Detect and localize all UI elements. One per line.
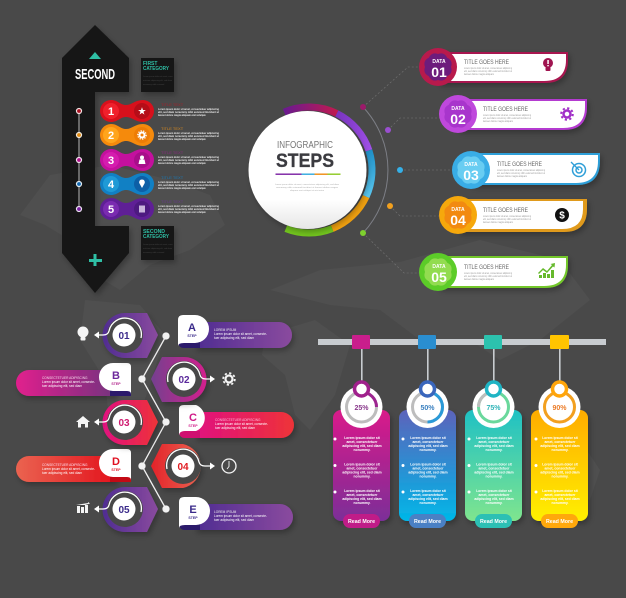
step pill 3: Lorem ipsum dolor sit amet, consectetuer adipiscing <box>158 155 219 159</box>
step C banner: Lorem ipsum dolor sit amet, consecte- <box>215 422 268 426</box>
hexagon step 01 <box>78 313 158 358</box>
data banner 03: laoreet dolore magna aliquam <box>497 175 527 178</box>
progress card 75%: adipiscing elit, sed diam <box>474 444 514 448</box>
progress card 75%: amet, consectetuer <box>479 440 510 444</box>
step pill 5: laoreet dolore magna aliquam erat volutpat. <box>158 210 206 214</box>
progress card 75%: adipiscing elit, sed diam <box>474 470 514 474</box>
heading: second: SECOND <box>75 66 115 83</box>
icon: dollar <box>555 208 569 222</box>
data banner 04: Lorem ipsum dolor sit amet, consectetuer adipiscing <box>483 215 532 218</box>
data banner 03: 03 <box>463 167 479 183</box>
progress card 90%: adipiscing elit, sed diam <box>540 470 580 474</box>
icon: teal plus <box>89 254 102 266</box>
step B banner: Lorem ipsum dolor sit amet, consecte- <box>42 380 95 384</box>
hexagon step 05: 05 <box>118 505 130 516</box>
step A banner <box>178 315 292 348</box>
first category box: CATEGORY <box>143 66 170 72</box>
title: INFOGRAPHIC <box>277 140 333 151</box>
progress card 90%: nonummy. <box>552 501 569 505</box>
progress card 90%: adipiscing elit, sed diam <box>540 497 580 501</box>
progress card 25%: Lorem ipsum dolor sit <box>344 489 381 493</box>
second category box: Lorem ipsum dolor sit amet, cons <box>143 243 172 246</box>
data banner 03: Lorem ipsum dolor sit amet, consectetuer adipiscing <box>497 169 546 172</box>
data banner 03: TITLE GOES HERE <box>497 161 543 168</box>
progress card 25%: adipiscing elit, sed diam <box>342 497 382 501</box>
data banner 04: laoreet dolore magna aliquam <box>483 221 513 224</box>
step pill 2: elit, sed diam nonummy nibh euismod tincidunt ut <box>158 134 219 138</box>
step pill 3: elit, sed diam nonummy nibh euismod tincidunt ut <box>158 158 219 162</box>
step pill 1: 1 <box>108 106 114 118</box>
step D banner <box>16 449 131 482</box>
progress card 25%: amet, consectetuer <box>347 440 378 444</box>
progress card 90%: amet, consectetuer <box>545 440 576 444</box>
progress card 75%: amet, consectetuer <box>479 466 510 470</box>
step pill 4: Lorem ipsum dolor sit amet, consectetuer adipiscing <box>158 180 219 184</box>
world map silhouette <box>20 165 600 500</box>
step C banner: C <box>189 412 197 424</box>
progress card 75%: Lorem ipsum dolor sit <box>476 436 513 440</box>
step E banner <box>179 497 293 530</box>
progress card 50% <box>399 335 456 528</box>
step pill 5: TITLE TEXT <box>161 199 184 204</box>
progress card 25%: amet, consectetuer <box>347 466 378 470</box>
step pill 1: ★ <box>138 106 147 118</box>
icon: gear <box>561 108 573 120</box>
progress card 25%: adipiscing elit, sed diam <box>342 444 382 448</box>
step pill 5: Lorem ipsum dolor sit amet, consectetuer adipiscing <box>158 204 219 208</box>
step B banner: B <box>112 370 120 382</box>
progress card 90%: Lorem ipsum dolor sit <box>542 462 579 466</box>
central circle: infographic steps: STEPS <box>276 151 334 172</box>
data banner 01: TITLE GOES HERE <box>464 59 510 66</box>
progress card 75%: nonummy. <box>486 501 503 505</box>
data banner 02 <box>439 95 587 133</box>
progress card 75%: nonummy. <box>486 448 503 452</box>
data banner 03: elit, sed diam nonummy nibh euismod tincidunt ut <box>497 172 545 175</box>
data banner 02: Lorem ipsum dolor sit amet, consectetuer adipiscing <box>483 114 532 117</box>
data banner 04: TITLE GOES HERE <box>483 207 529 214</box>
progress card 90%: adipiscing elit, sed diam <box>540 444 580 448</box>
hexagon step 02 <box>151 357 235 402</box>
progress card 90% <box>531 335 588 528</box>
step A banner: LOREM IPSUM <box>214 328 237 332</box>
data banner 05: Lorem ipsum dolor sit amet, consectetuer adipiscing <box>464 272 513 275</box>
hanging bar <box>318 339 606 345</box>
progress card 75%: amet, consectetuer <box>479 493 510 497</box>
icon: teal triangle <box>89 52 101 59</box>
data banner 03: DATA <box>464 162 478 168</box>
hexagon step 04: 04 <box>177 462 189 473</box>
progress card 75%: adipiscing elit, sed diam <box>474 497 514 501</box>
step pill 3: TITLE TEXT <box>161 150 184 155</box>
progress card 25%: nonummy. <box>354 501 371 505</box>
progress card 50%: Lorem ipsum dolor sit <box>410 462 447 466</box>
central circle: infographic steps: Lorem ipsum dolor sit amet, consectetuer adipiscing elit, sed diam <box>275 183 339 186</box>
step D banner: Lorem ipsum dolor sit amet, consecte- <box>42 467 95 471</box>
step pill 3: 3 <box>108 155 114 167</box>
progress card 25%: Lorem ipsum dolor sit <box>344 436 381 440</box>
step pill 1 <box>100 100 219 122</box>
hexagon step 03 <box>76 400 158 445</box>
icon: house <box>76 416 90 428</box>
icon: clock <box>222 459 236 473</box>
step B banner: STEP <box>111 382 121 386</box>
progress card 75%: Lorem ipsum dolor sit <box>476 489 513 493</box>
step E banner: Lorem ipsum dolor sit amet, consecte- <box>214 514 267 518</box>
panel: second category column <box>62 25 219 293</box>
step D banner: STEP <box>111 468 121 472</box>
icon: dollar: $ <box>559 210 565 222</box>
step pill 5 <box>100 198 219 220</box>
step pill 1: Lorem ipsum dolor sit amet, consectetuer adipiscing <box>158 107 219 111</box>
progress card 50%: adipiscing elit, sed diam <box>408 444 448 448</box>
hexagon step 03: 03 <box>118 418 130 429</box>
progress card 50%: amet, consectetuer <box>413 440 444 444</box>
progress card 50%: amet, consectetuer <box>413 466 444 470</box>
data banner 01: elit, sed diam nonummy nibh euismod tincidunt ut <box>464 70 512 73</box>
step pill 1: laoreet dolore magna aliquam erat volutpat. <box>158 113 206 117</box>
step pill 4: TITLE TEXT <box>161 175 184 180</box>
data banner 01: 01 <box>431 64 447 80</box>
black arrow panel <box>62 25 129 293</box>
step pill 4: 4 <box>108 179 115 191</box>
progress card 50%: nonummy. <box>420 501 437 505</box>
progress card 25%: adipiscing elit, sed diam <box>342 470 382 474</box>
step E banner: STEP <box>188 516 198 520</box>
data banner 02: 02 <box>450 111 466 127</box>
hexagon step 04 <box>151 444 236 488</box>
step A banner: A <box>188 322 196 334</box>
progress card 25%: amet, consectetuer <box>347 493 378 497</box>
data banner 01: DATA <box>432 59 446 65</box>
data banner 04: elit, sed diam nonummy nibh euismod tincidunt ut <box>483 218 531 221</box>
progress card 75%: 75% <box>486 405 501 412</box>
progress card 25%: nonummy. <box>354 448 371 452</box>
progress card 75% <box>465 335 522 528</box>
progress card 75%: nonummy. <box>486 474 503 478</box>
step C banner: CONSECTETUER ADIPISCING <box>215 418 261 422</box>
step pill 4: elit, sed diam nonummy nibh euismod tincidunt ut <box>158 183 219 187</box>
progress card 25% <box>333 335 390 528</box>
step pill 5: 5 <box>108 204 114 216</box>
progress card 50%: nonummy. <box>420 448 437 452</box>
step C banner: tuer adipiscing elit, sed diam <box>215 426 255 430</box>
data banner 02: TITLE GOES HERE <box>483 106 529 113</box>
step pill 5: elit, sed diam nonummy nibh euismod tincidunt ut <box>158 207 219 211</box>
progress card 90%: amet, consectetuer <box>545 493 576 497</box>
progress card 90%: amet, consectetuer <box>545 466 576 470</box>
progress card 25%: Lorem ipsum dolor sit <box>344 462 381 466</box>
step pill 2: 2 <box>108 130 114 142</box>
multicolour rule <box>276 174 340 175</box>
step pill 4: laoreet dolore magna aliquam erat volutpat. <box>158 186 206 190</box>
central circle: infographic steps: nonummy nibh euismod tincidunt ut laoreet dolore magna <box>276 186 339 189</box>
data banner 05 <box>419 253 568 291</box>
second category box: CATEGORY <box>143 234 170 240</box>
first category box: ectetuer adipiscing elit, sed diam <box>143 79 172 82</box>
icon: bulb <box>543 58 553 71</box>
data banner 02: elit, sed diam nonummy nibh euismod tincidunt ut <box>483 117 531 120</box>
data banner 01: laoreet dolore magna aliquam <box>464 73 494 76</box>
data banner 05: elit, sed diam nonummy nibh euismod tincidunt ut <box>464 275 512 278</box>
data banner 03 <box>452 151 600 189</box>
first category box: nonummy nibh euismod <box>143 84 164 86</box>
step B banner: CONSECTETUER ADIPISCING <box>42 376 88 380</box>
hexagon step 05 <box>76 487 158 532</box>
data banner 02: DATA <box>451 106 465 112</box>
icon: chart <box>76 502 90 513</box>
icon: gear <box>223 373 235 385</box>
step pill 3: laoreet dolore magna aliquam erat volutpat. <box>158 161 206 165</box>
step pill 2: laoreet dolore magna aliquam erat volutpat. <box>158 137 206 141</box>
step E banner: LOREM IPSUM <box>214 510 237 514</box>
progress card 75%: Lorem ipsum dolor sit <box>476 462 513 466</box>
data banner 02: laoreet dolore magna aliquam <box>483 120 513 123</box>
step pill 2: Lorem ipsum dolor sit amet, consectetuer adipiscing <box>158 131 219 135</box>
progress card 50%: amet, consectetuer <box>413 493 444 497</box>
icon: bulb <box>78 326 88 340</box>
progress card 50%: 50% <box>420 405 435 412</box>
icon: growth chart <box>538 263 555 278</box>
progress card 25%: Read More <box>348 519 375 525</box>
first category box <box>141 58 174 92</box>
data banner 05: 05 <box>431 269 447 285</box>
progress card 50%: Lorem ipsum dolor sit <box>410 489 447 493</box>
progress card 75%: Read More <box>480 519 507 525</box>
progress card 50%: adipiscing elit, sed diam <box>408 470 448 474</box>
progress card 25%: 25% <box>354 405 369 412</box>
progress card 25%: nonummy. <box>354 474 371 478</box>
data banner 04: 04 <box>450 212 466 228</box>
step B banner <box>16 363 131 396</box>
data banner 05: laoreet dolore magna aliquam <box>464 278 494 281</box>
step pill 2: TITLE TEXT <box>161 126 184 131</box>
data banner 05: DATA <box>432 264 446 270</box>
step E banner: tuer adipiscing elit, sed diam <box>214 518 254 522</box>
progress card 50%: nonummy. <box>420 474 437 478</box>
step D banner: CONSECTETUER ADIPISCING <box>42 463 88 467</box>
step pill 1: TITLE TEXT <box>161 102 184 107</box>
timeline connector line <box>139 333 169 512</box>
progress card 90%: Lorem ipsum dolor sit <box>542 436 579 440</box>
second category box: ectetuer adipiscing elit, sed diam <box>143 247 172 250</box>
step A banner: Lorem ipsum dolor sit amet, consecte- <box>214 332 267 336</box>
data banner 04: DATA <box>451 207 465 213</box>
data banner 04 <box>439 196 587 234</box>
second category box <box>141 226 174 260</box>
hexagon step 01: 01 <box>118 331 130 342</box>
segmented ring <box>284 107 372 233</box>
data banner 05: TITLE GOES HERE <box>464 264 510 271</box>
progress card 50%: Read More <box>414 519 441 525</box>
step pill 1: elit, sed diam nonummy nibh euismod tincidunt ut <box>158 110 219 114</box>
progress card 90%: Read More <box>546 519 573 525</box>
data banner 01 <box>419 48 568 86</box>
progress card 90%: nonummy. <box>552 448 569 452</box>
icon: target <box>571 162 586 176</box>
step E banner: E <box>189 504 197 516</box>
first category box: FIRST <box>143 61 157 67</box>
hexagon step 02: 02 <box>178 375 190 386</box>
second category box: nonummy nibh euismod <box>143 252 164 254</box>
timeline <box>76 108 82 212</box>
step D banner: D <box>112 456 120 468</box>
first category box: Lorem ipsum dolor sit amet, cons <box>143 75 172 78</box>
progress card 90%: 90% <box>552 405 567 412</box>
step pill 4 <box>100 173 219 195</box>
step A banner: tuer adipiscing elit, sed diam <box>214 336 254 340</box>
data banner 01: Lorem ipsum dolor sit amet, consectetuer adipiscing <box>464 67 513 70</box>
dashed and arc connectors <box>360 67 453 273</box>
step pill 3 <box>100 149 219 171</box>
step A banner: STEP <box>187 334 197 338</box>
step D banner: tuer adipiscing elit, sed diam <box>42 471 82 475</box>
step C banner <box>179 405 294 438</box>
step C banner: STEP <box>188 424 198 428</box>
progress card 50%: Lorem ipsum dolor sit <box>410 436 447 440</box>
progress card 90%: nonummy. <box>552 474 569 478</box>
step pill 2 <box>100 124 219 146</box>
central circle: infographic steps: aliquam erat volutpat ut wisi enim <box>290 189 324 192</box>
progress card 50%: adipiscing elit, sed diam <box>408 497 448 501</box>
second category box: SECOND <box>143 229 165 235</box>
step B banner: tuer adipiscing elit, sed diam <box>42 384 82 388</box>
central circle: infographic steps <box>248 107 372 233</box>
progress card 90%: Lorem ipsum dolor sit <box>542 489 579 493</box>
